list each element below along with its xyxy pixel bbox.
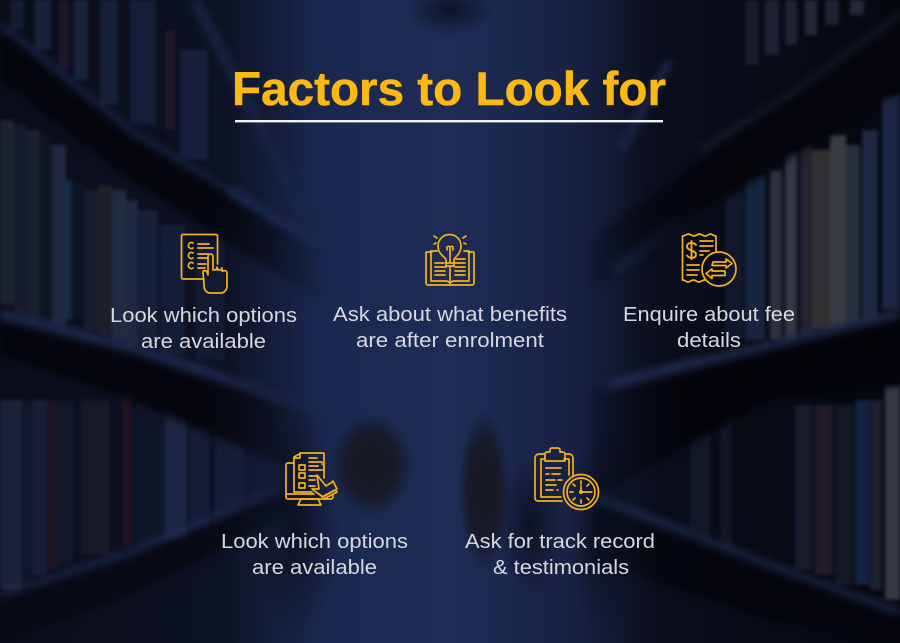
item 2: benefits after enrolment (333, 234, 567, 352)
right shelf books (590, 0, 900, 643)
text: details: details (677, 330, 741, 352)
left shelf boards (0, 22, 330, 643)
item 1: options available (110, 234, 297, 353)
aisle light strips (195, 0, 735, 535)
item 5: track record and testimonials (465, 448, 655, 579)
text: are available: are available (141, 331, 266, 353)
left shelf books (0, 0, 330, 643)
text: are available: are available (252, 557, 377, 579)
icon: receipt with exchange arrows (682, 234, 736, 286)
item 4: options available (221, 453, 408, 579)
text: and testimonials: & testimonials (493, 557, 629, 579)
text: ask about what benefits: Ask about what benefits (333, 304, 567, 326)
text: ask for track record: Ask for track record (465, 531, 655, 553)
text: are after enrolment: are after enrolment (356, 330, 544, 352)
text: enquire about fee: Enquire about fee (623, 304, 795, 326)
text: look which options: Look which options (221, 531, 408, 553)
icon: monitor with form and hand (286, 453, 337, 505)
item 3: fee details (623, 234, 795, 352)
icon: checklist with pointing hand (182, 234, 227, 293)
text: look which options: Look which options (110, 305, 297, 327)
title underline (235, 120, 663, 122)
icon: clipboard with clock (535, 448, 598, 510)
icon: book with lightbulb (426, 234, 474, 285)
title: Factors to Look for (232, 62, 666, 115)
right shelf boards (590, 12, 900, 643)
